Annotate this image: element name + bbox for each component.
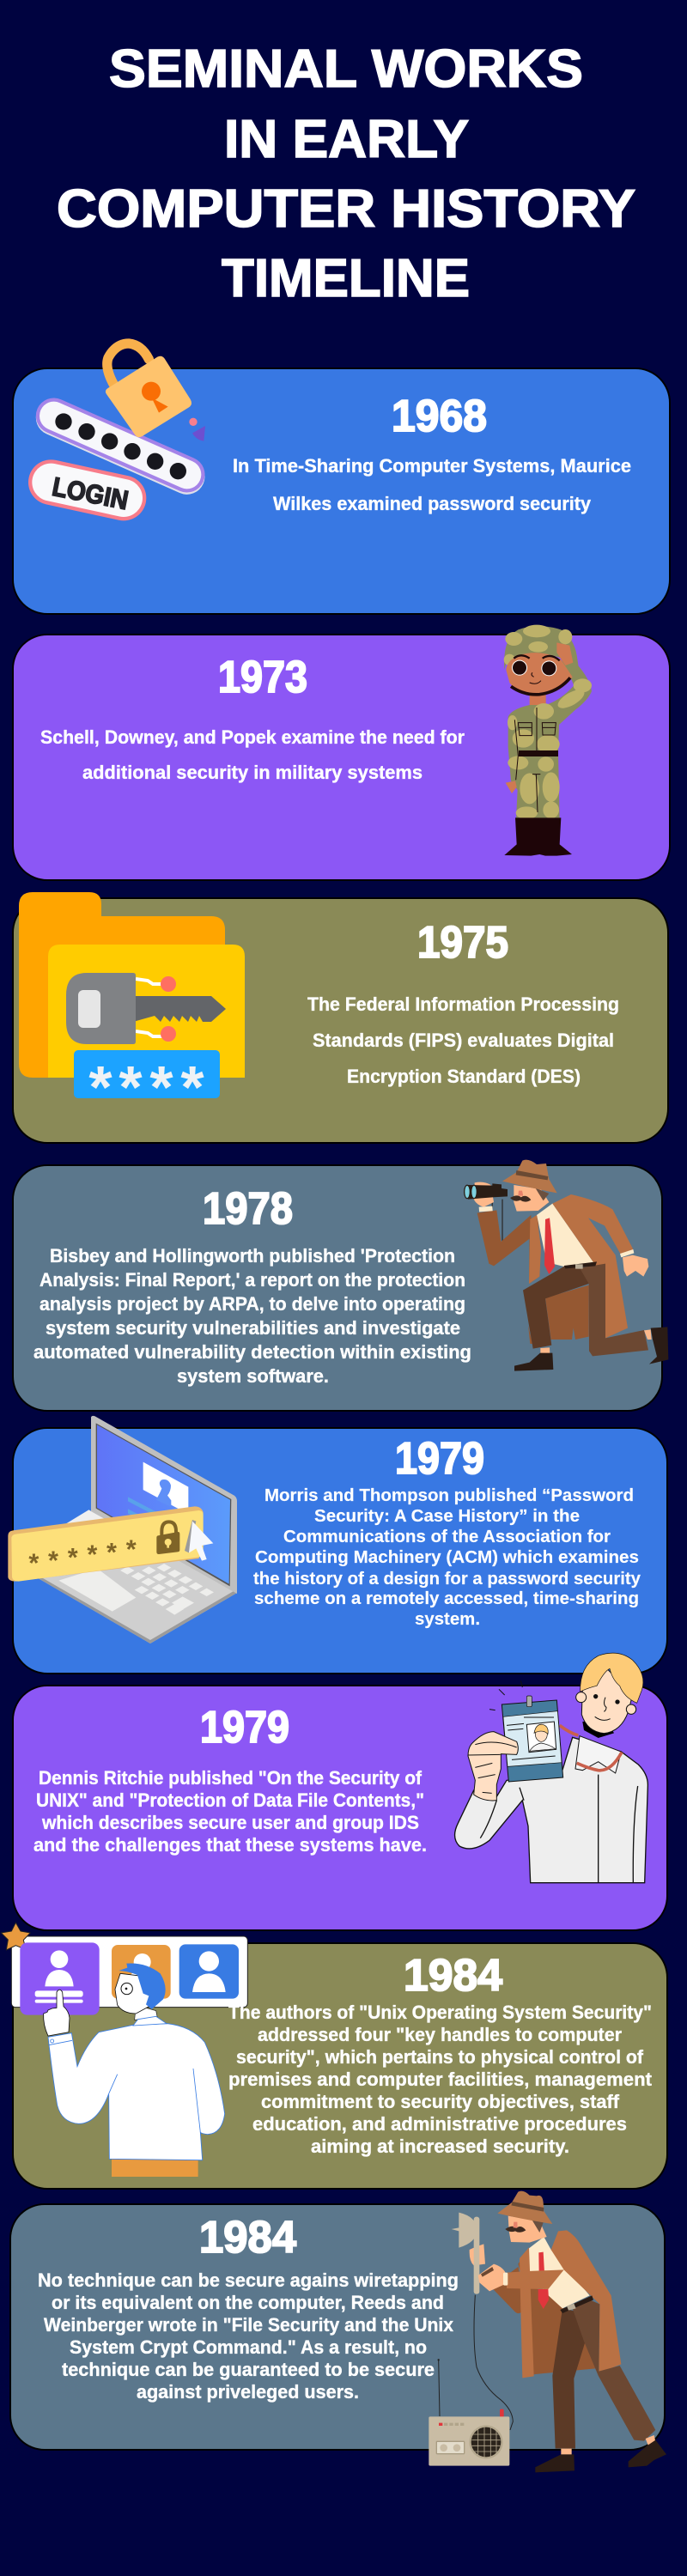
description: scheme on a remotely accessed, time-sharing: [254, 1589, 639, 1608]
description: system.: [415, 1609, 480, 1629]
description: No technique can be secure agains wiretapping: [38, 2269, 459, 2291]
icon: login password and padlock: [50, 343, 205, 515]
panel: 1973: [13, 625, 670, 880]
description: Dennis Ritchie published "On the Security of: [39, 1767, 423, 1789]
panel: 1978: [13, 1160, 668, 1411]
year: 1984: [404, 1951, 502, 2001]
year: 1978: [203, 1184, 293, 1234]
description: Bisbey and Hollingworth published 'Protection: [50, 1245, 455, 1267]
icon: detective with binoculars: [464, 1160, 668, 1371]
description: [33, 1767, 427, 1856]
description: [228, 2002, 653, 2157]
description: additional security in military systems: [82, 762, 423, 783]
description: Encryption Standard (DES): [347, 1066, 581, 1087]
title: COMPUTER HISTORY: [57, 179, 635, 239]
panel: 1979 unix security: [13, 1653, 667, 1930]
description: the history of a design for a password security: [253, 1569, 641, 1589]
description: [233, 455, 631, 514]
year: 1979: [395, 1434, 484, 1484]
description: security", which pertains to physical control of: [236, 2046, 644, 2068]
year: 1973: [218, 653, 307, 702]
description: [38, 2269, 459, 2403]
description: [307, 993, 619, 1087]
icon: folder with key and password: ****: [88, 1054, 204, 1121]
panel: 1968: [13, 343, 670, 614]
title: TIMELINE: [222, 249, 470, 308]
description: The authors of "Unix Operating System Security": [228, 2002, 652, 2023]
description: The Federal Information Processing: [307, 993, 619, 1015]
description: [40, 726, 465, 783]
panel: 1984 unix operating system security: [1, 1923, 667, 2189]
description: system software.: [177, 1365, 329, 1387]
description: commitment to security objectives, staff: [261, 2091, 620, 2112]
description: Communications of the Association for: [283, 1527, 611, 1546]
description: Morris and Thompson published “Password: [264, 1485, 634, 1505]
description: system security vulnerabilities and investigate: [46, 1317, 460, 1339]
description: education, and administrative procedures: [252, 2113, 627, 2135]
icon: user profile cards with pointing man: [1, 1923, 247, 2177]
year: 1979: [200, 1703, 289, 1753]
panel: 1979 password security: [8, 1416, 667, 1674]
panel: 1984 wiretapping: [10, 2191, 666, 2472]
description: technique can be guaranteed to be secure: [62, 2359, 435, 2380]
icon: detective with listening dish and radio: [429, 2191, 666, 2472]
description: and the challenges that these systems have.: [33, 1834, 427, 1856]
description: [33, 1245, 471, 1387]
description: Weinberger wrote in "File Security and the Unix: [44, 2314, 454, 2336]
description: Standards (FIPS) evaluates Digital: [313, 1030, 614, 1051]
title: SEMINAL WORKS: [109, 39, 583, 99]
year: 1975: [417, 918, 508, 968]
icon: laptop with password bar: ******: [28, 1535, 137, 1578]
description: System Crypt Command." As a result, no: [70, 2336, 427, 2358]
icon: saluting soldier: [504, 625, 592, 856]
panel: 1975: [13, 892, 668, 1143]
title: [57, 39, 635, 308]
description: automated vulnerability detection within existing: [33, 1341, 471, 1363]
icon: login password and padlock: LOGIN: [50, 472, 131, 515]
year: 1968: [392, 392, 487, 441]
icon: folder with key and password: [19, 892, 245, 1121]
icon: man holding ID badge: [455, 1653, 647, 1883]
description: addressed four "key handles to computer: [258, 2024, 622, 2045]
description: In Time-Sharing Computer Systems, Maurice: [233, 455, 631, 477]
description: aiming at increased security.: [311, 2136, 569, 2157]
description: against priveleged users.: [137, 2381, 359, 2403]
year: 1984: [199, 2213, 296, 2263]
description: Schell, Downey, and Popek examine the need for: [40, 726, 465, 748]
description: UNIX" and "Protection of Data File Contents,": [36, 1789, 424, 1811]
description: Computing Machinery (ACM) which examines: [255, 1547, 639, 1567]
title: IN EARLY: [224, 110, 469, 169]
description: Wilkes examined password security: [273, 493, 592, 514]
description: [253, 1485, 641, 1629]
icon: laptop with password bar: [8, 1416, 237, 1643]
description: or its equivalent on the computer, Reeds and: [52, 2292, 444, 2313]
description: Analysis: Final Report,' a report on the protection: [40, 1269, 465, 1291]
description: which describes secure user and group IDS: [41, 1812, 419, 1833]
description: analysis project by ARPA, to delve into operating: [40, 1293, 465, 1315]
description: Security: A Case History” in the: [314, 1506, 580, 1526]
description: premises and computer facilities, management: [228, 2069, 653, 2090]
